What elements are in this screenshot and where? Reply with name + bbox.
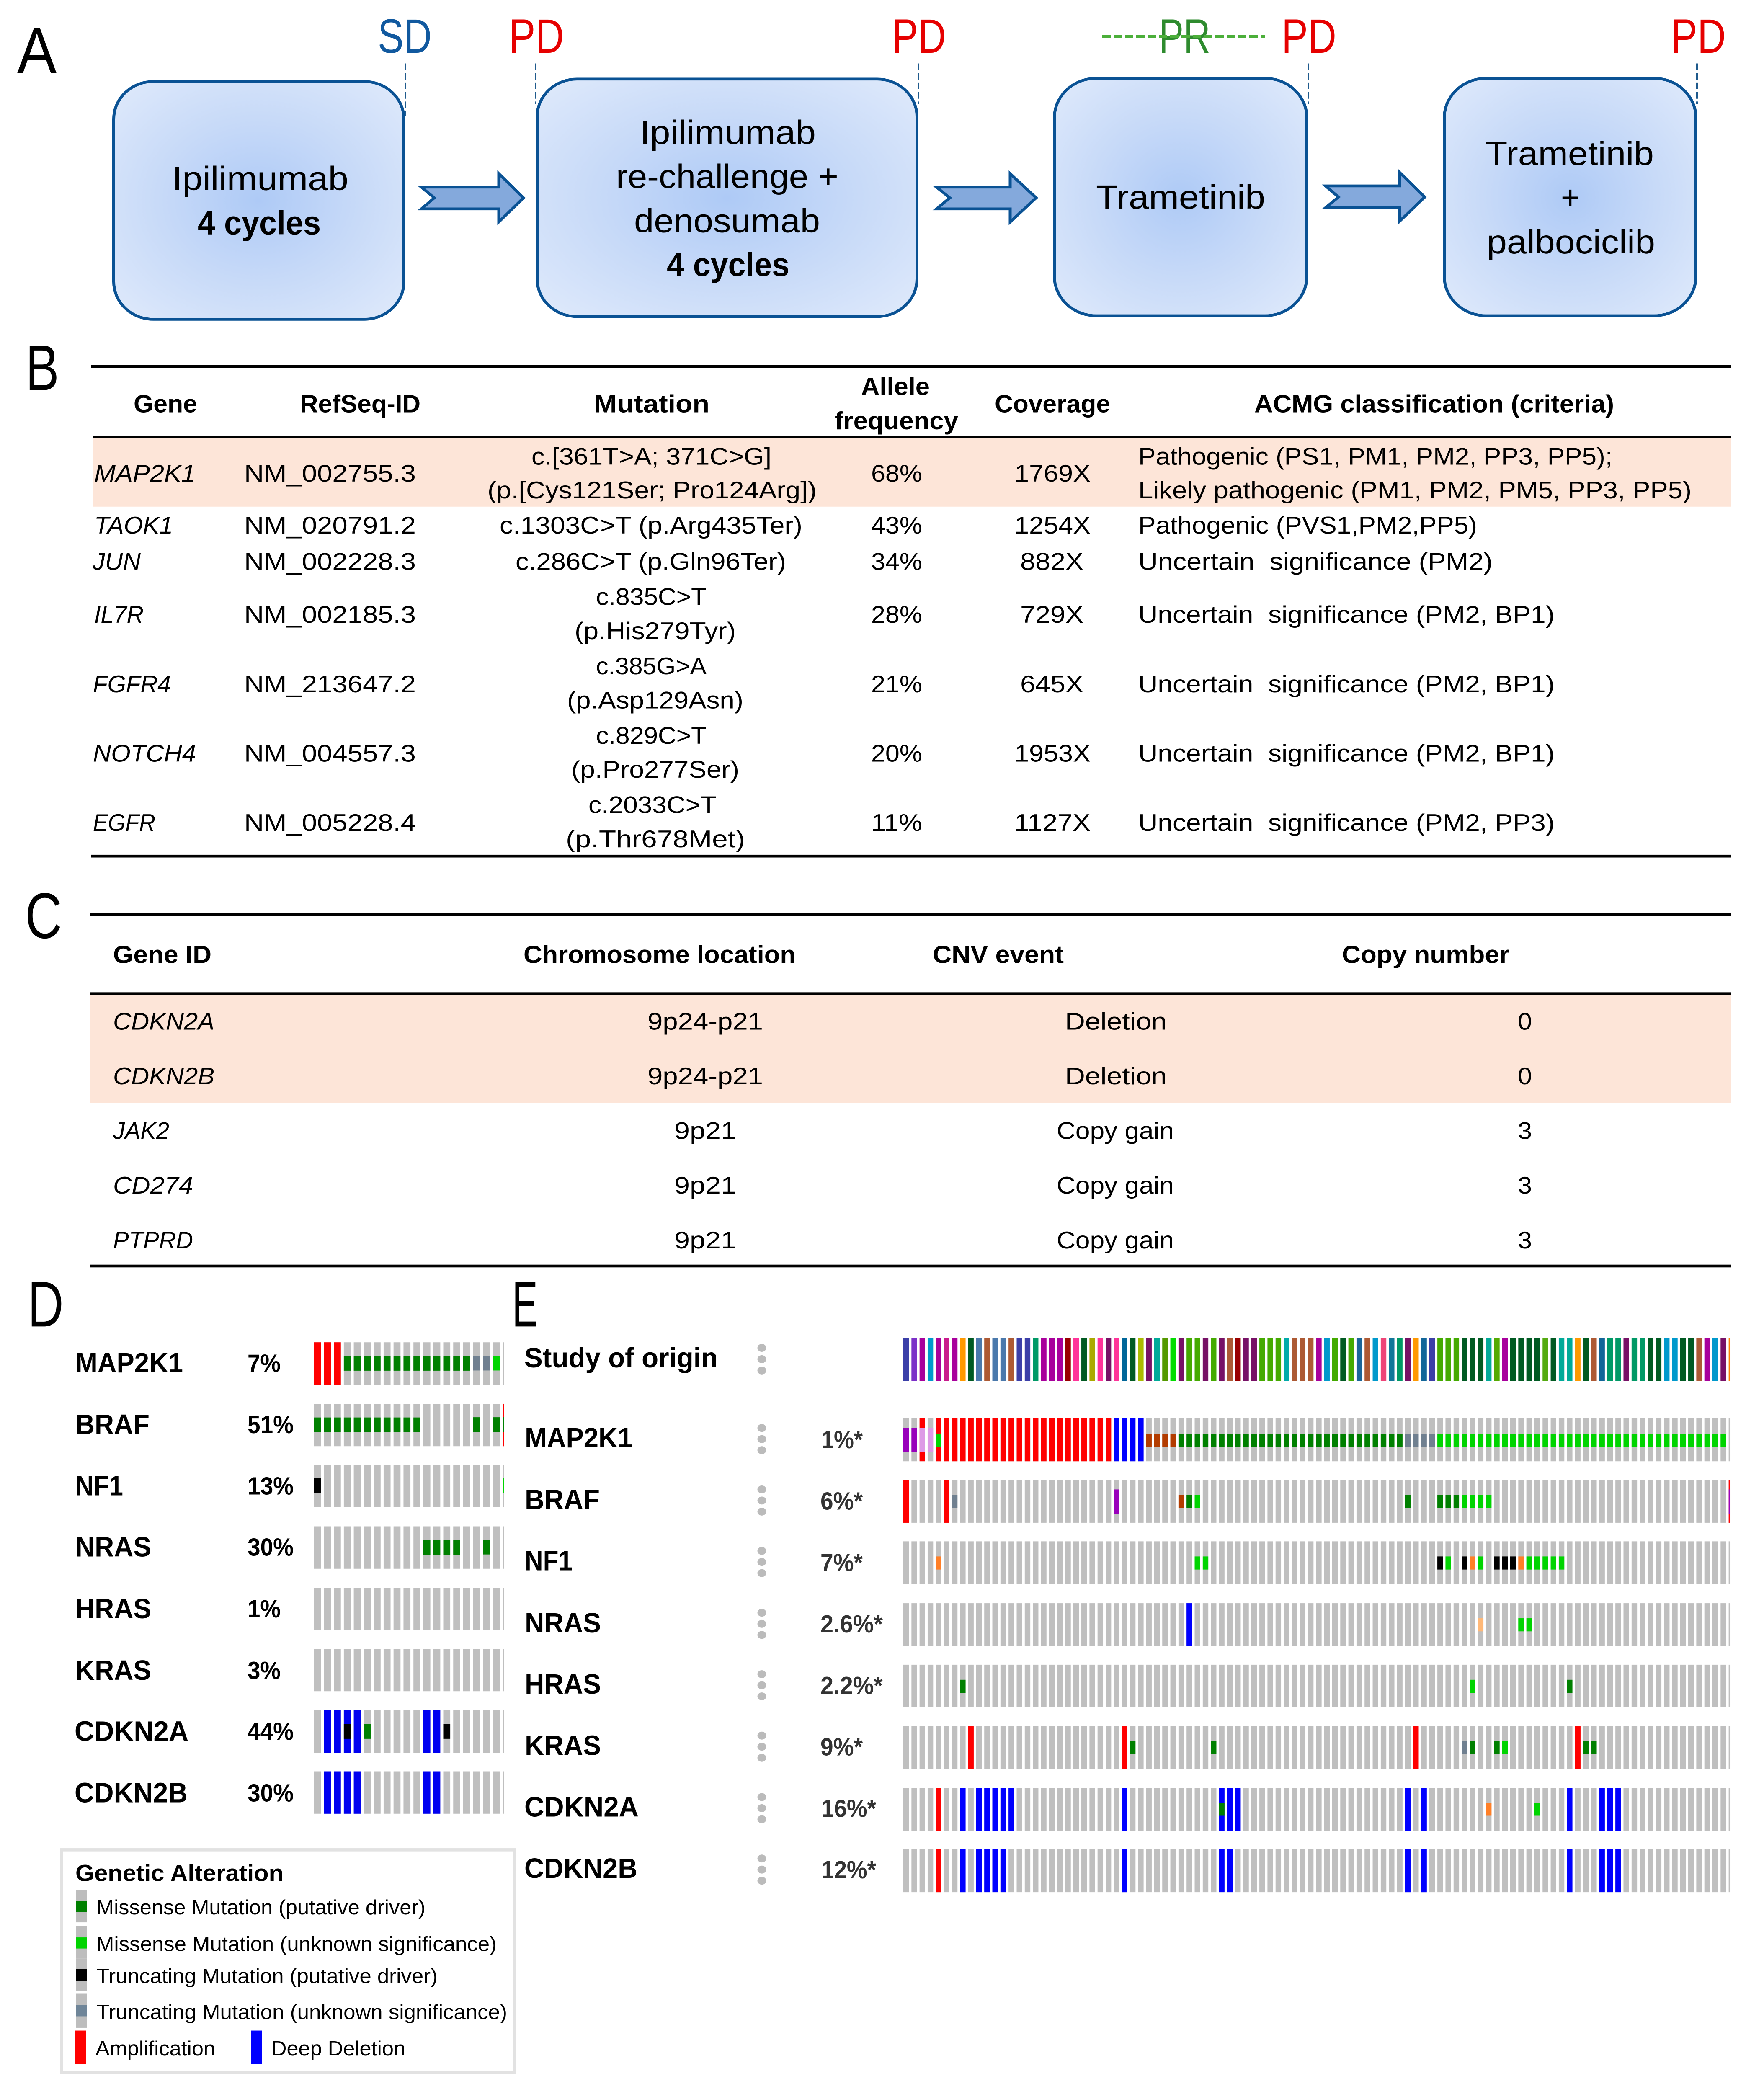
highlighted row: MAP2K1: 1769X (1014, 460, 1091, 487)
table row: CDKN2B (113, 1062, 1532, 1090)
therapy box: ipilimumab: 4 cycles (198, 204, 321, 242)
gene labels and percentages: NRAS (75, 1531, 151, 1563)
highlighted row: MAP2K1: 68% (871, 460, 922, 487)
table row: EGFR: 1127X (1014, 809, 1091, 836)
track: HRAS (960, 1680, 1573, 1693)
gene labels: NF1 (525, 1545, 573, 1576)
table row: JAK2: 9p21 (674, 1117, 736, 1144)
alteration percentages (820, 1426, 883, 1884)
table row: IL7R: 28% (871, 601, 922, 628)
highlighted row: MAP2K1 (93, 438, 1731, 507)
table row: IL7R: NM_002185.3 (244, 601, 416, 628)
table row: PTPRD: PTPRD (113, 1226, 193, 1254)
gene labels: Study of origin (524, 1342, 718, 1373)
table row: IL7R: (p.His279Tyr) (575, 617, 736, 645)
track: NRAS (423, 1540, 490, 1555)
alteration percentages: 2.2%* (820, 1671, 883, 1699)
legend: genetic alteration (62, 1850, 514, 2073)
table row: EGFR: Uncertain significance (PM2, PP3) (1138, 809, 1555, 836)
table row: FGFR4: 21% (871, 670, 922, 697)
gene labels and percentages: NF1 (75, 1470, 123, 1501)
panel letter B: B (26, 331, 59, 404)
gene labels: KRAS (525, 1729, 601, 1761)
highlight band for deleted genes (90, 995, 1731, 1103)
table row: TAOK1: Pathogenic (PVS1,PM2,PP5) (1138, 512, 1477, 539)
table row: JUN: NM_002228.3 (244, 548, 416, 575)
panel E: oncoprint pan-cancer (512, 1268, 1730, 1892)
track: MAP2K1 (314, 1342, 500, 1385)
table row: JUN: JUN (92, 548, 141, 575)
track: NRAS (1186, 1603, 1532, 1646)
gene labels and percentages: 51% (248, 1411, 294, 1439)
table row: JAK2: Copy gain (1057, 1117, 1174, 1144)
panel letter D: D (28, 1268, 64, 1340)
therapy box: ipilimumab re-challenge plus denosumab: Ipilimumab (640, 114, 816, 151)
table row: NOTCH4: NM_004557.3 (244, 740, 416, 767)
table row: CDKN2B: CDKN2B (113, 1062, 214, 1090)
track: NF1 (314, 1478, 504, 1493)
table B header: frequency (835, 407, 958, 435)
table row: IL7R: 729X (1020, 601, 1083, 628)
highlighted row: MAP2K1: (p.[Cys121Ser; Pro124Arg]) (487, 476, 817, 504)
table C header: Chromosome location (524, 940, 796, 968)
gene labels: HRAS (525, 1668, 601, 1700)
table C header (113, 940, 1509, 968)
table B header: Allele (861, 372, 930, 400)
menu dots (757, 1344, 766, 1885)
legend item: truncating unknown significance (76, 1994, 507, 2028)
table row: EGFR: (p.Thr678Met) (566, 825, 745, 853)
legend item: amplification: Amplification (95, 2037, 215, 2060)
track: CDKN2B (324, 1770, 440, 1815)
alteration percentages: 9%* (820, 1733, 863, 1761)
gene labels and percentages: 1% (248, 1595, 281, 1623)
table row: IL7R: c.835C>T (596, 583, 707, 610)
gene labels: NRAS (525, 1607, 601, 1639)
table row: PTPRD: 9p21 (674, 1226, 736, 1254)
table row: PTPRD: 3 (1518, 1226, 1532, 1254)
table B header: Gene (134, 389, 197, 418)
panel letter A: A (17, 14, 57, 87)
legend item: missense putative driver (76, 1890, 426, 1922)
response marker: PR with dashed duration line: PR (1159, 9, 1210, 63)
table row: NOTCH4: Uncertain significance (PM2, BP1) (1138, 740, 1555, 767)
highlighted row: MAP2K1: NM_002755.3 (244, 460, 416, 487)
oncoprint tracks (903, 1338, 1730, 1892)
legend item: missense putative driver: Missense Mutation (putative driver) (96, 1895, 426, 1919)
table row: TAOK1 (94, 512, 1477, 539)
response marker: PD after trametinib: PD (1282, 9, 1336, 63)
table row: EGFR: NM_005228.4 (244, 809, 416, 836)
track: BRAF (314, 1404, 504, 1446)
table row: NOTCH4 (93, 722, 1555, 783)
response marker: PD after re-challenge: PD (892, 9, 946, 63)
table row: CDKN2A: Deletion (1065, 1008, 1167, 1035)
table row: CDKN2B: 9p24-p21 (647, 1062, 763, 1090)
table B header: RefSeq-ID (300, 389, 420, 418)
therapy box: trametinib: Trametinib (1096, 179, 1265, 216)
table C header: Copy number (1342, 940, 1509, 968)
alteration percentages: 2.6%* (820, 1610, 883, 1638)
therapy box: trametinib (1055, 78, 1307, 316)
table row: FGFR4: c.385G>A (596, 652, 707, 680)
response marker: SD: SD (378, 9, 432, 63)
table row: FGFR4: Uncertain significance (PM2, BP1) (1138, 670, 1555, 697)
table row: FGFR4: 645X (1020, 670, 1083, 697)
track: CDKN2A (324, 1724, 450, 1739)
gene labels and percentages: 3% (248, 1656, 281, 1684)
panel C: copy number variation table (25, 879, 1731, 1267)
highlighted row: MAP2K1: MAP2K1 (94, 460, 196, 487)
table row: IL7R: Uncertain significance (PM2, BP1) (1138, 601, 1555, 628)
track: MAP2K1 (903, 1418, 1726, 1461)
panel letter C: C (25, 879, 62, 952)
alteration percentages: 7%* (820, 1548, 863, 1576)
table row: CD274: CD274 (113, 1172, 193, 1199)
gene labels and percentages: BRAF (75, 1408, 150, 1440)
gene labels and percentages: CDKN2B (75, 1777, 188, 1808)
legend item: deep deletion: Deep Deletion (271, 2037, 405, 2060)
table row: JUN: c.286C>T (p.Gln96Ter) (516, 548, 786, 575)
table row: EGFR: 11% (871, 809, 922, 836)
table row: NOTCH4: c.829C>T (596, 722, 707, 749)
gene labels: CDKN2A (524, 1791, 639, 1823)
panel letter E: E (512, 1268, 538, 1340)
highlighted row: MAP2K1: c.[361T>A; 371C>G] (531, 443, 771, 470)
table row: EGFR (93, 791, 1555, 853)
table row: CD274: 3 (1518, 1172, 1532, 1199)
table row: JUN: 882X (1020, 548, 1083, 575)
track: NF1 (936, 1556, 1564, 1570)
therapy box: trametinib plus palbociclib: palbociclib (1487, 224, 1655, 260)
therapy box: ipilimumab re-challenge plus denosumab: denosumab (634, 203, 820, 240)
table row: CD274: Copy gain (1057, 1172, 1174, 1199)
table row: IL7R (94, 583, 1555, 645)
legend item: truncating unknown significance: Truncating Mutation (unknown significance) (96, 2000, 507, 2024)
therapy box: ipilimumab (114, 82, 404, 319)
table row: JAK2: JAK2 (113, 1117, 169, 1144)
panel D: oncoprint cohort (28, 1268, 514, 2073)
table row: EGFR: EGFR (93, 809, 155, 836)
table row: NOTCH4: 20% (871, 740, 922, 767)
table row: CDKN2B: 0 (1518, 1062, 1532, 1090)
therapy box: ipilimumab re-challenge plus denosumab: 4 cycles (667, 246, 789, 283)
table row: TAOK1: c.1303C>T (p.Arg435Ter) (500, 512, 802, 539)
table row: CDKN2A (113, 1008, 1532, 1035)
table B header (134, 372, 1614, 435)
therapy box: ipilimumab: Ipilimumab (172, 160, 348, 197)
gene labels (524, 1342, 718, 1884)
table row: JAK2 (113, 1117, 1532, 1144)
gene labels and percentages: 7% (248, 1349, 281, 1377)
table row: EGFR: c.2033C>T (588, 791, 717, 818)
therapy box: ipilimumab re-challenge plus denosumab (537, 79, 917, 317)
gene labels and percentages: HRAS (75, 1593, 151, 1625)
track: KRAS (968, 1726, 1597, 1769)
table B header: ACMG classification (criteria) (1254, 389, 1614, 418)
table row: FGFR4: NM_213647.2 (244, 670, 416, 697)
table row: CDKN2A: 9p24-p21 (647, 1008, 763, 1035)
legend item: truncating putative driver: Truncating Mutation (putative driver) (96, 1964, 438, 1988)
gene labels and percentages: MAP2K1 (75, 1347, 183, 1379)
table row: CDKN2B: Deletion (1065, 1062, 1167, 1090)
arrow: second to third therapy (936, 174, 1036, 222)
gene labels and percentages: KRAS (75, 1654, 151, 1686)
gene labels and percentages: 44% (248, 1717, 294, 1745)
legend item: truncating putative driver (76, 1958, 438, 1991)
therapy box: trametinib plus palbociclib (1444, 78, 1696, 316)
table row: JUN: 34% (871, 548, 922, 575)
alteration percentages: 6%* (820, 1487, 863, 1515)
therapy box: trametinib plus palbociclib: + (1561, 179, 1580, 216)
table C header: CNV event (933, 940, 1064, 968)
highlighted row: MAP2K1: Pathogenic (PS1, PM1, PM2, PP3, PP5); (1138, 443, 1612, 470)
table row: CDKN2A: CDKN2A (113, 1008, 214, 1035)
table row: JAK2: 3 (1518, 1117, 1532, 1144)
legend: genetic alteration: Genetic Alteration (75, 1860, 284, 1886)
table row: PTPRD: Copy gain (1057, 1226, 1174, 1254)
highlighted row: MAP2K1: Likely pathogenic (PM1, PM2, PM5, PP3, PP5) (1138, 476, 1692, 504)
track: BRAF (903, 1480, 1730, 1523)
table row: JUN: Uncertain significance (PM2) (1138, 548, 1493, 575)
legend item: missense unknown significance (76, 1926, 497, 1958)
table row: PTPRD (113, 1226, 1532, 1254)
table row: CD274: 9p21 (674, 1172, 736, 1199)
gene labels and percentages: 30% (248, 1533, 294, 1561)
table row: TAOK1: 1254X (1014, 512, 1091, 539)
table row: FGFR4 (93, 652, 1555, 714)
table row: CDKN2A: 0 (1518, 1008, 1532, 1035)
panel B: somatic mutation table (26, 331, 1731, 858)
table row: NOTCH4: (p.Pro277Ser) (571, 756, 739, 783)
gene labels: BRAF (525, 1483, 600, 1515)
track: CDKN2A (936, 1788, 1621, 1831)
track: study of origin (903, 1338, 1730, 1381)
alteration percentages: 1%* (821, 1426, 863, 1454)
legend item: deep deletion (251, 2031, 405, 2064)
track: CDKN2B (936, 1849, 1621, 1892)
alteration percentages: 12%* (821, 1856, 876, 1884)
table row: FGFR4: (p.Asp129Asn) (567, 686, 743, 714)
oncoprint tracks (314, 1342, 504, 1792)
therapy box: ipilimumab re-challenge plus denosumab: re-challenge + (616, 158, 838, 195)
gene labels and percentages: CDKN2A (75, 1715, 188, 1747)
gene labels and percentages (75, 1347, 294, 1808)
gene labels and percentages: 30% (248, 1779, 294, 1807)
response marker: PD after ipilimumab start: PD (509, 9, 564, 63)
table B header: Mutation (594, 389, 709, 418)
table row: TAOK1: TAOK1 (94, 512, 173, 539)
response marker: PD after combination: PD (1671, 9, 1726, 63)
table row: NOTCH4: 1953X (1014, 740, 1091, 767)
panel A: treatment timeline (17, 9, 1726, 319)
arrow: first to second therapy (421, 174, 524, 222)
table row: FGFR4: FGFR4 (93, 670, 171, 697)
legend item: missense unknown significance: Missense Mutation (unknown significance) (96, 1932, 497, 1955)
table row: CD274 (113, 1172, 1532, 1199)
legend item: amplification (75, 2031, 215, 2064)
table row: TAOK1: 43% (871, 512, 922, 539)
table B header: Coverage (995, 389, 1110, 418)
table C header: Gene ID (113, 940, 211, 968)
gene labels: CDKN2B (524, 1852, 637, 1884)
table row: NOTCH4: NOTCH4 (93, 740, 196, 767)
gene labels: MAP2K1 (525, 1422, 632, 1454)
table row: JUN (92, 548, 1493, 575)
alteration percentages: 16%* (821, 1794, 876, 1822)
arrow: third to fourth therapy (1326, 173, 1425, 221)
table row: TAOK1: NM_020791.2 (244, 512, 416, 539)
table row: IL7R: IL7R (94, 601, 144, 628)
gene labels and percentages: 13% (248, 1472, 294, 1500)
therapy box: trametinib plus palbociclib: Trametinib (1485, 135, 1654, 172)
